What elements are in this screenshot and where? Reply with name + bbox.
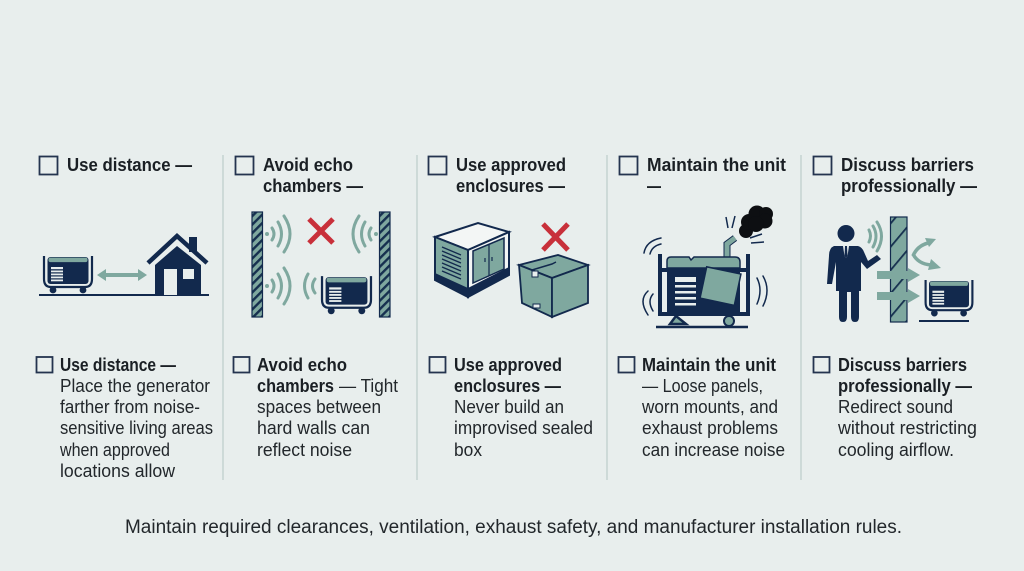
text: avoid echo chambers: — Tight <box>339 375 398 396</box>
text: avoid echo chambers: Avoid echo <box>257 354 347 375</box>
text: discuss barriers professionally <box>814 354 977 460</box>
text: avoid echo chambers: chambers <box>257 375 334 396</box>
panel: discuss barriers professionally <box>814 154 977 460</box>
text: maintain the unit: can increase noise <box>642 439 785 460</box>
text: use approved enclosures: Never build an <box>454 396 564 417</box>
heading: use approved enclosures: Use approved <box>456 154 566 175</box>
heading: discuss barriers professionally: professionally — <box>841 175 977 196</box>
icon: professional, barrier and redirected sound <box>827 217 972 322</box>
text: avoid echo chambers <box>234 354 398 460</box>
text: use approved enclosures: Use approved <box>454 354 562 375</box>
text: use distance: Use distance — <box>60 354 176 375</box>
heading: use approved enclosures <box>428 154 566 196</box>
icon: sound reflecting between walls <box>252 212 390 317</box>
text: use approved enclosures <box>430 354 593 460</box>
footer note: Maintain required clearances, ventilation, exhaust safety, and manufacturer installation rules. <box>125 517 902 538</box>
heading: maintain the unit: — <box>647 175 661 196</box>
heading: use approved enclosures: enclosures — <box>456 175 565 196</box>
text: discuss barriers professionally: Redirect sound <box>838 396 953 417</box>
text: use approved enclosures: improvised sealed <box>454 417 593 438</box>
icon: approved enclosure versus sealed box <box>435 223 588 317</box>
text: discuss barriers professionally: without restricting <box>837 417 977 438</box>
text: discuss barriers professionally: cooling airflow. <box>838 439 954 460</box>
heading: avoid echo chambers: Avoid echo <box>263 154 353 175</box>
panel: avoid echo chambers <box>234 154 398 460</box>
text: maintain the unit: — Loose panels, <box>642 375 763 396</box>
text: avoid echo chambers: hard walls can <box>257 417 370 438</box>
text: maintain the unit: worn mounts, and <box>641 396 778 417</box>
text: maintain the unit: Maintain the unit <box>642 354 776 375</box>
panel: use approved enclosures <box>428 154 593 460</box>
text: discuss barriers professionally: Discuss barriers <box>838 354 967 375</box>
heading: use distance: Use distance — <box>67 154 192 175</box>
text: use distance: farther from noise- <box>60 396 200 417</box>
text: use distance <box>36 354 213 481</box>
text: maintain the unit: exhaust problems <box>642 417 778 438</box>
panel: maintain the unit <box>618 154 786 460</box>
icon: loose rattling generator with smoke <box>643 206 773 327</box>
text: use approved enclosures: box <box>454 439 483 460</box>
heading: avoid echo chambers: chambers — <box>263 175 363 196</box>
heading: avoid echo chambers <box>236 154 363 196</box>
heading: discuss barriers professionally: Discuss barriers <box>841 154 974 175</box>
text: use approved enclosures: enclosures — <box>454 375 561 396</box>
text: use distance: Place the generator <box>60 375 210 396</box>
text: use distance: when approved <box>59 439 170 460</box>
icon: generator away from house <box>39 236 209 295</box>
text: discuss barriers professionally: professionally — <box>838 375 972 396</box>
text: use distance: locations allow <box>60 460 176 481</box>
panel: use distance <box>36 154 213 481</box>
heading: discuss barriers professionally <box>814 154 977 196</box>
text: avoid echo chambers: reflect noise <box>257 439 352 460</box>
text: maintain the unit <box>618 354 785 460</box>
heading: maintain the unit: Maintain the unit <box>647 154 786 175</box>
text: use distance: sensitive living areas <box>60 417 213 438</box>
text: avoid echo chambers: spaces between <box>257 396 381 417</box>
heading: maintain the unit <box>620 154 786 196</box>
